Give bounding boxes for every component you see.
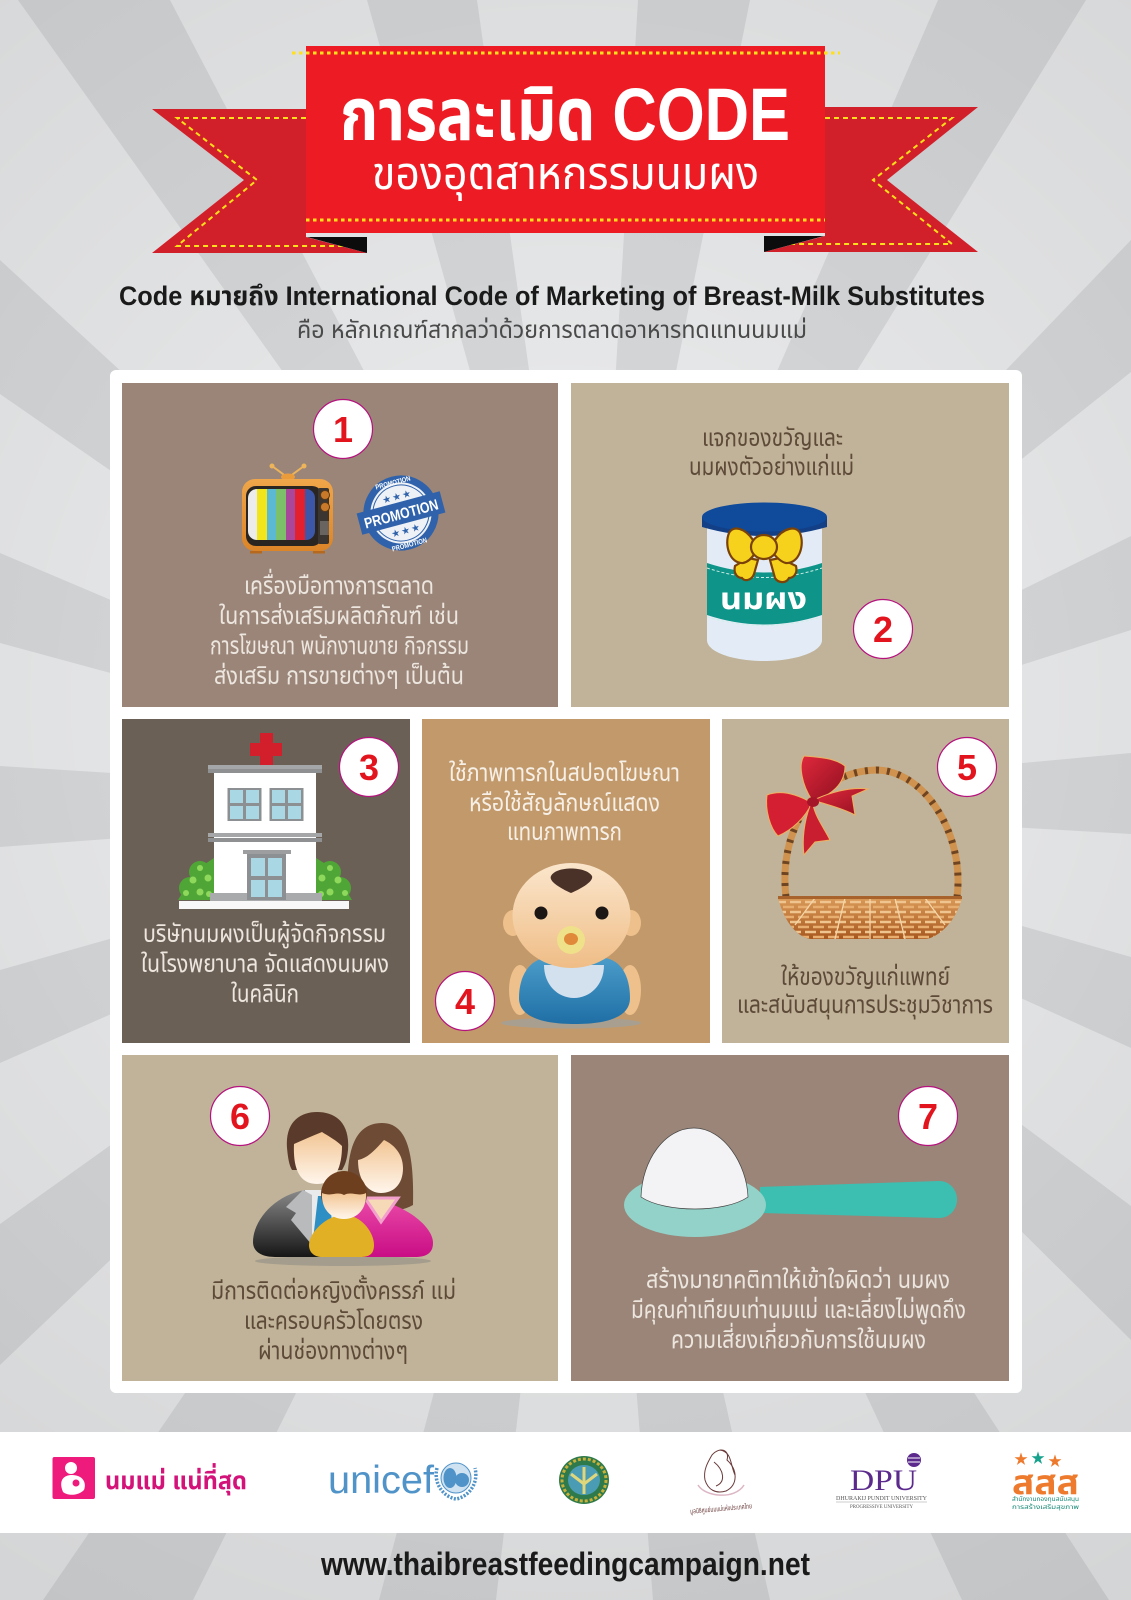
icon: promotion stamp: PROMOTION: [362, 496, 440, 532]
logo: DPU university: [836, 1453, 928, 1510]
panel 5: gifts to doctors: [722, 719, 1009, 1043]
panel 1: marketing tools: [122, 383, 558, 707]
icon: baby with pacifier: [501, 863, 641, 1028]
panel 6 text: ผ่านช่องทางต่างๆ: [258, 1337, 408, 1365]
banner: right tail: [764, 107, 978, 252]
panel 7 text: มีคุณค่าเทียบเท่านมแม่ และเลี่ยงไม่พูดถึง: [631, 1292, 966, 1325]
panel 2 text: แจกของขวัญและ: [702, 424, 843, 452]
banner: left stitching: [177, 118, 345, 246]
panel 3 text: ในคลินิก: [231, 980, 299, 1008]
panel 2: gifts and samples: [571, 383, 1009, 707]
icon: promotion stamp: PROMOTION: [375, 475, 411, 492]
icon: formula can with bow: นมผง: [720, 583, 807, 616]
panel 4 text: [449, 759, 680, 846]
icon: scoop of milk powder: [624, 1128, 957, 1237]
banner: [152, 46, 978, 253]
number badge 7: [898, 1086, 958, 1146]
white container panel: [110, 370, 1022, 1393]
panel 7: misleading claims: [571, 1055, 1009, 1381]
panel 1 text: [210, 568, 469, 690]
number badge 4: [436, 972, 494, 1030]
banner: top dotted line: [292, 52, 840, 54]
panel 1 text: ในการส่งเสริมผลิตภัณฑ์ เช่น: [219, 602, 459, 630]
number badge 6: 6: [230, 1096, 250, 1137]
banner: bottom dotted line: [306, 218, 825, 222]
logo: DPU university: DHURAKIJ PUNDIT UNIVERSITY: [836, 1496, 928, 1502]
number badge 3: 3: [359, 747, 379, 788]
logo: ThaiHealth: สสส: [1012, 1464, 1079, 1502]
title line 1: การละเมิด CODE: [340, 73, 790, 156]
number badge 2: [854, 600, 912, 658]
panel 4 text: ใช้ภาพทารกในสปอตโฆษณา: [449, 759, 680, 787]
icon: retro television: [242, 464, 333, 554]
heading: definition of Code: Code หมายถึง International Code of Marketing of Breast-Milk Substitutes: [119, 281, 985, 311]
number badge 4: 4: [455, 981, 475, 1022]
icon: promotion stamp: ★ ★ ★: [382, 489, 412, 505]
logo: ThaiHealth: สำนักงานกองทุนสนับสนุน: [1012, 1496, 1079, 1503]
logo: thai breastfeeding foundation: [690, 1450, 752, 1516]
panel 2 text: นมผงตัวอย่างแก่แม่: [689, 453, 854, 481]
panel 7 text: ความเสี่ยงเกี่ยวกับการใช้นมผง: [671, 1322, 926, 1354]
banner: right stitching: [790, 118, 952, 244]
icon: family of three: [253, 1112, 433, 1266]
logo: ThaiHealth: ★: [1048, 1453, 1062, 1469]
logo: DPU university: PROGRESSIVE UNIVERSITY: [850, 1505, 913, 1510]
number badge 1: [314, 400, 372, 458]
logo: ministry of public health seal: [559, 1456, 609, 1504]
icon: promotion stamp: PROMOTION: [391, 537, 428, 553]
panel 7 text: สร้างมายาคติทาให้เข้าใจผิดว่า นมผง: [646, 1266, 950, 1294]
panel 1 text: ส่งเสริม การขายต่างๆ เป็นต้น: [214, 662, 464, 690]
banner: right fold: [764, 236, 824, 252]
logo: ThaiHealth: ★: [1031, 1450, 1045, 1466]
panel 5 text: [737, 963, 993, 1020]
icon: promotion stamp: ★ ★ ★: [391, 523, 421, 539]
panel 1 text: เครื่องมือทางการตลาด: [244, 568, 434, 600]
panel 6 text: มีการติดต่อหญิงตั้งครรภ์ แม่: [211, 1274, 456, 1305]
logo: unicef: unicef: [328, 1459, 434, 1502]
banner: left fold: [307, 237, 367, 253]
logo: thai breastfeeding foundation: มูลนิธิศูนย์นมแม่แห่งประเทศไทย: [690, 1501, 752, 1516]
banner: left tail: [152, 109, 367, 253]
panel 5 text: ให้ของขวัญแก่แพทย์: [781, 963, 950, 991]
panel 4 text: หรือใช้สัญลักษณ์แสดง: [469, 789, 660, 817]
footer logo strip: [0, 1432, 1131, 1533]
title line 2: ของอุตสาหกรรมนมผง: [372, 147, 759, 201]
icon: promotion stamp: [351, 469, 452, 560]
logo: breastfeeding campaign: [52, 1457, 247, 1499]
panel 3 text: บริษัทนมผงเป็นผู้จัดกิจกรรม: [143, 920, 386, 949]
panel 7 text: [631, 1266, 966, 1354]
number badge 2: 2: [873, 609, 893, 650]
panel 4: baby imagery: [422, 719, 710, 1043]
panel 3: hospital activities: [122, 719, 410, 1043]
logo: breastfeeding campaign: นมแม่ แน่ที่สุด: [105, 1463, 247, 1496]
panel 3 text: [141, 920, 389, 1008]
logo: DPU university: DPU: [850, 1464, 917, 1497]
panel 4 text: แทนภาพทารก: [507, 818, 622, 846]
icon: hospital building: [178, 733, 352, 909]
website URL: www.thaibreastfeedingcampaign.net: [320, 1546, 810, 1582]
banner: center panel: [306, 46, 825, 233]
panel 3 text: ในโรงพยาบาล จัดแสดงนมผง: [141, 950, 389, 978]
subheading: Thai explanation: คือ หลักเกณฑ์สากลว่าด้วยการตลาดอาหารทดแทนนมแม่: [297, 316, 807, 344]
number badge 3: [340, 738, 398, 796]
icon: formula can with bow: [702, 502, 827, 661]
icon: wicker basket with red bow: [767, 756, 965, 939]
number badge 1: 1: [333, 409, 353, 450]
number badge 5: 5: [957, 747, 977, 788]
panel 6 text: [211, 1274, 456, 1365]
number badge 5: [938, 738, 996, 796]
number badge 7: 7: [918, 1096, 938, 1137]
panel 6 text: และครอบครัวโดยตรง: [244, 1307, 423, 1335]
panel 6: direct contact with family: [122, 1055, 558, 1381]
panel 1 text: การโฆษณา พนักงานขาย กิจกรรม: [210, 632, 469, 660]
logo: ThaiHealth: [1012, 1450, 1079, 1511]
logo: ThaiHealth: การสร้างเสริมสุขภาพ: [1012, 1504, 1079, 1511]
panel 2 text: [689, 424, 854, 481]
logo: ThaiHealth: ★: [1014, 1451, 1028, 1467]
number badge 6: [210, 1086, 270, 1146]
panel 5 text: และสนับสนุนการประชุมวิชาการ: [737, 991, 993, 1020]
